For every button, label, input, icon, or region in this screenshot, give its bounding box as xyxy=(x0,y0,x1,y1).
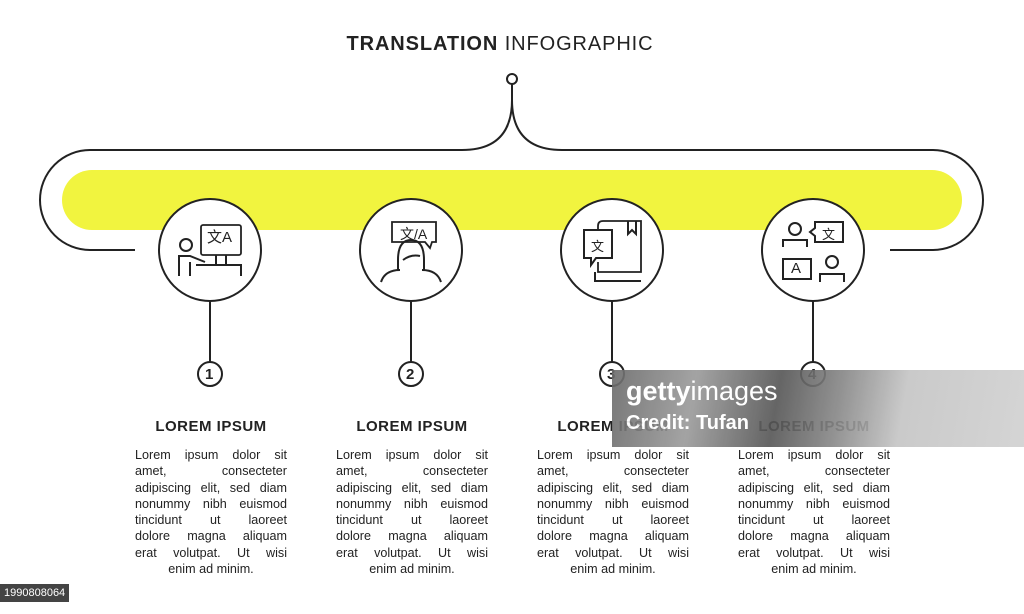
column 4 text: enim ad minim. xyxy=(771,562,857,576)
title: TRANSLATION INFOGRAPHIC xyxy=(346,33,654,55)
column 3 text: adipiscing elit, sed diam xyxy=(537,481,689,495)
step 4 marker xyxy=(762,199,864,386)
column 1 text: tincidunt ut laoreet xyxy=(135,513,287,527)
icon glyphs and numbers: 文A xyxy=(207,229,232,246)
column 4 text: LOREM IPSUM xyxy=(758,418,870,435)
column 3 text: nonummy nibh euismod xyxy=(537,497,689,511)
column 4 text: adipiscing elit, sed diam xyxy=(738,481,890,495)
column 4 text: amet, consecteter xyxy=(738,464,890,478)
icon glyphs and numbers: 2 xyxy=(406,366,414,383)
column 3 text: LOREM IPSUM xyxy=(557,418,669,435)
column 3 text: tincidunt ut laoreet xyxy=(537,513,689,527)
column 1 text: adipiscing elit, sed diam xyxy=(135,481,287,495)
column 4 text: nonummy nibh euismod xyxy=(738,497,890,511)
column 2 text: adipiscing elit, sed diam xyxy=(336,481,488,495)
column 4 text: dolore magna aliquam xyxy=(738,529,890,543)
step 3 marker xyxy=(561,199,663,386)
column 2 text: dolore magna aliquam xyxy=(336,529,488,543)
column 1 text: amet, consecteter xyxy=(135,464,287,478)
column 3 text: enim ad minim. xyxy=(570,562,656,576)
column 4 text: Lorem ipsum dolor sit xyxy=(738,448,890,462)
icon glyphs and numbers: 文 xyxy=(591,239,604,254)
icon glyphs and numbers: 1 xyxy=(205,366,213,383)
icon glyphs and numbers: 4 xyxy=(808,366,816,383)
column 2 text: erat volutpat. Ut wisi xyxy=(336,546,488,560)
column 3 text: Lorem ipsum dolor sit xyxy=(537,448,689,462)
column 1 text: erat volutpat. Ut wisi xyxy=(135,546,287,560)
column 2 text: amet, consecteter xyxy=(336,464,488,478)
column 3 text: amet, consecteter xyxy=(537,464,689,478)
icon glyphs and numbers: 文 xyxy=(822,227,835,242)
icon glyphs and numbers: A xyxy=(791,260,801,277)
connector from title xyxy=(40,74,983,250)
column 2 text: tincidunt ut laoreet xyxy=(336,513,488,527)
watermark: gettyimages xyxy=(626,376,778,406)
column 4 text: erat volutpat. Ut wisi xyxy=(738,546,890,560)
column 3 text: dolore magna aliquam xyxy=(537,529,689,543)
column 1 text: enim ad minim. xyxy=(168,562,254,576)
column 1 text xyxy=(135,418,287,576)
column 3 text xyxy=(537,418,689,576)
column 4 text: tincidunt ut laoreet xyxy=(738,513,890,527)
column 4 text xyxy=(738,418,890,576)
column 1 text: Lorem ipsum dolor sit xyxy=(135,448,287,462)
column 2 text: nonummy nibh euismod xyxy=(336,497,488,511)
icon glyphs and numbers: 3 xyxy=(607,366,615,383)
column 1 text: LOREM IPSUM xyxy=(155,418,267,435)
column 1 text: nonummy nibh euismod xyxy=(135,497,287,511)
column 2 text: enim ad minim. xyxy=(369,562,455,576)
watermark: Credit: Tufan xyxy=(626,412,749,434)
column 3 text: erat volutpat. Ut wisi xyxy=(537,546,689,560)
image id xyxy=(0,584,69,602)
column 2 text: Lorem ipsum dolor sit xyxy=(336,448,488,462)
watermark xyxy=(612,370,1024,447)
icon glyphs and numbers: 文/A xyxy=(400,226,427,242)
image id: 1990808064 xyxy=(4,587,65,599)
column 2 text xyxy=(336,418,488,576)
yellow bar xyxy=(62,170,962,230)
step 2 marker xyxy=(360,199,462,386)
column 1 text: dolore magna aliquam xyxy=(135,529,287,543)
column 2 text: LOREM IPSUM xyxy=(356,418,468,435)
step 1 marker xyxy=(159,199,261,386)
